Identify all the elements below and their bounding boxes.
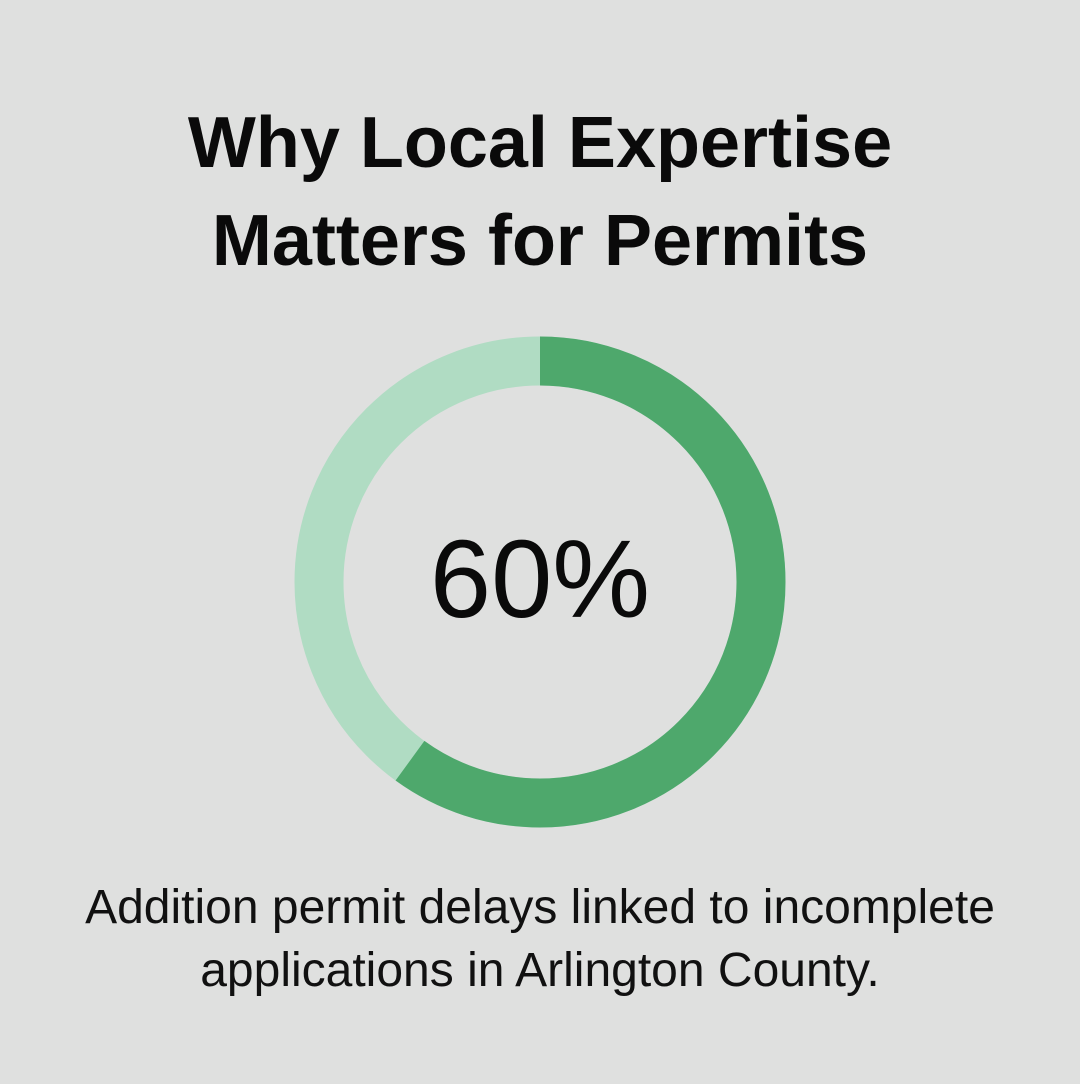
caption: Addition permit delays linked to incomplete: [85, 881, 995, 934]
title: [188, 103, 892, 281]
caption: applications in Arlington County.: [200, 944, 880, 997]
donut track: [319, 361, 761, 803]
title: Why Local Expertise: [188, 103, 892, 183]
caption: [85, 881, 995, 997]
title: Matters for Permits: [212, 201, 868, 281]
donut value 60%: [319, 361, 761, 803]
center value: 60%: [430, 518, 650, 641]
